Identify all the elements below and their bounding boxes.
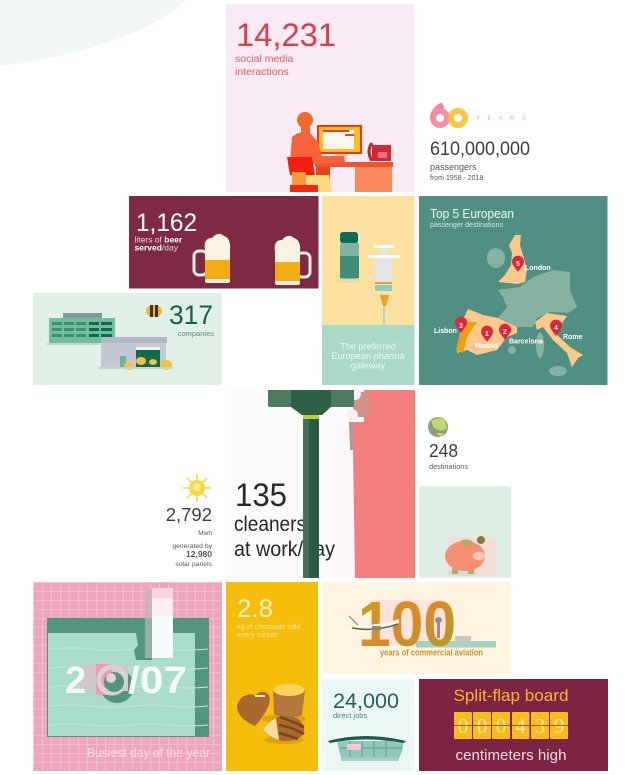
label: cleaners at work/day: at work/day [234, 538, 335, 561]
icon: sun [183, 474, 211, 502]
panel: beer served [129, 196, 318, 288]
flaps: 000439: 0 [496, 714, 506, 738]
label: The preferred European pharma gateway: gateway [351, 360, 386, 370]
label: direct jobs: direct jobs [333, 711, 367, 720]
pin: Madrid 1: Madrid [475, 343, 498, 350]
pin: Madrid 1 [475, 326, 498, 350]
label: The preferred European pharma gateway: The preferred [340, 342, 396, 352]
icon: control tower [435, 617, 442, 638]
pin: Lisbon 3 [434, 317, 467, 335]
pin: London 5: 5 [516, 261, 520, 268]
label: cleaners at work/day: cleaners [234, 513, 306, 536]
pin: Barcelona 2: 2 [503, 329, 507, 336]
panel: 100 years of commercial aviation [322, 582, 511, 674]
label: companies: companies [178, 329, 214, 338]
label: The preferred European pharma gateway: European pharma [331, 351, 406, 361]
sub-heading: passenger destinations: passenger destinations [430, 222, 503, 229]
panel: piggy bank [419, 486, 511, 578]
icon: airplane [341, 616, 399, 631]
label: liters of beer served/day: beer [164, 234, 183, 244]
date: 20/07: /07 [128, 660, 187, 702]
panel: 60 years passengers [430, 105, 530, 182]
pin: Lisbon 3: Lisbon [434, 328, 457, 335]
stat: 248: 248 [429, 440, 458, 461]
icon: beer mug left [194, 234, 230, 283]
label: liters of beer served/day: /day [162, 242, 179, 252]
icon: globe [428, 417, 448, 437]
label: social media interactions: interactions [235, 66, 289, 78]
heading: Top 5 European: Top 5 European [430, 206, 514, 221]
label: social media interactions: social media [235, 53, 294, 65]
stat: 2.8: 2.8 [237, 595, 273, 623]
icon: warehouse [98, 337, 173, 370]
flaps: 000439: 9 [554, 714, 564, 738]
label: years of commercial aviation: years of commercial aviation [380, 648, 483, 658]
panel: direct jobs [322, 679, 414, 771]
stat: 24,000: 24,000 [333, 690, 399, 713]
pin: Madrid 1: 1 [485, 331, 489, 338]
pin: London 5: London [525, 265, 551, 272]
panel: split-flap board [419, 679, 608, 771]
pool illustration [47, 588, 209, 737]
logo: 60 years: Y E A R S [476, 116, 526, 122]
stat: 2,792: 2,792 [166, 504, 212, 525]
label: Mwh generated by 12,980 solar panels: 12,980 [186, 549, 212, 559]
panel: pharma gateway [322, 196, 414, 385]
label: centimeters high: centimeters high [456, 748, 566, 764]
panel: busiest day [33, 582, 222, 771]
heading: Split-flap board: Split-flap board [454, 687, 568, 705]
date: 20/07: 2 [65, 660, 86, 702]
icon: vial [336, 232, 362, 283]
icon: broom [268, 390, 354, 578]
label: Busiest day of the year: Busiest day of the year [87, 746, 210, 760]
icon: syringe [368, 245, 400, 325]
label: passengers from 1958 - 2018: from 1958 - 2018 [430, 175, 483, 182]
pin: Rome 4: Rome [563, 334, 583, 341]
flaps: 000439: 0 [477, 714, 487, 738]
stat: 317: 317 [169, 300, 213, 330]
icon: chocolates [237, 684, 306, 744]
label: Mwh generated by 12,980 solar panels: solar panels [175, 561, 213, 568]
panel: companies [33, 293, 222, 385]
pin: London 5 [512, 256, 551, 272]
map of Europe [456, 235, 583, 376]
icon: piggy bank [445, 536, 485, 576]
stat: 135: 135 [235, 477, 287, 513]
pin: Lisbon 3: 3 [459, 323, 463, 330]
label: destinations: destinations [429, 464, 469, 471]
flaps: 000439 [454, 712, 568, 739]
pin: Rome 4 [550, 320, 583, 341]
flaps: 000439: 3 [535, 714, 545, 738]
pin: Rome 4: 4 [554, 325, 558, 332]
icon: terminal building [328, 736, 406, 761]
label: liters of beer served/day: served [134, 242, 162, 252]
label: liters of beer served/day: liters of [134, 234, 164, 244]
flaps: 000439: 0 [458, 714, 468, 738]
cleaning cloth in red [346, 388, 415, 578]
pin: Barcelona 2: Barcelona [509, 338, 543, 346]
stat: 1,162: 1,162 [136, 209, 197, 237]
panel: chocolate sold [226, 582, 318, 771]
stat block: destinations [428, 417, 469, 471]
icon: person at desk [287, 112, 393, 192]
stat: 14,231: 14,231 [236, 17, 336, 53]
label: kg of chocolate sold every minute: every minute [237, 630, 278, 639]
icon: office building [47, 313, 117, 345]
number: 100: 100 [358, 588, 456, 660]
label: kg of chocolate sold every minute: kg of chocolate sold [237, 622, 301, 631]
icon: bee [146, 305, 162, 317]
pin: Barcelona 2 [499, 324, 543, 346]
panel: social media interactions [226, 4, 414, 192]
panel: top 5 destinations map [419, 196, 608, 385]
label: Mwh generated by 12,980 solar panels: generated by [172, 543, 213, 550]
label: passengers from 1958 - 2018: passengers [430, 162, 477, 172]
label: Mwh generated by 12,980 solar panels: Mwh [198, 530, 212, 537]
panel: cleaners at work [226, 388, 415, 578]
stat: 610,000,000: 610,000,000 [430, 139, 530, 160]
icon: beer mug right [275, 236, 310, 285]
flaps: 000439: 4 [515, 714, 526, 738]
stat block: solar energy [166, 474, 213, 568]
decorative corner curve [0, 0, 186, 66]
